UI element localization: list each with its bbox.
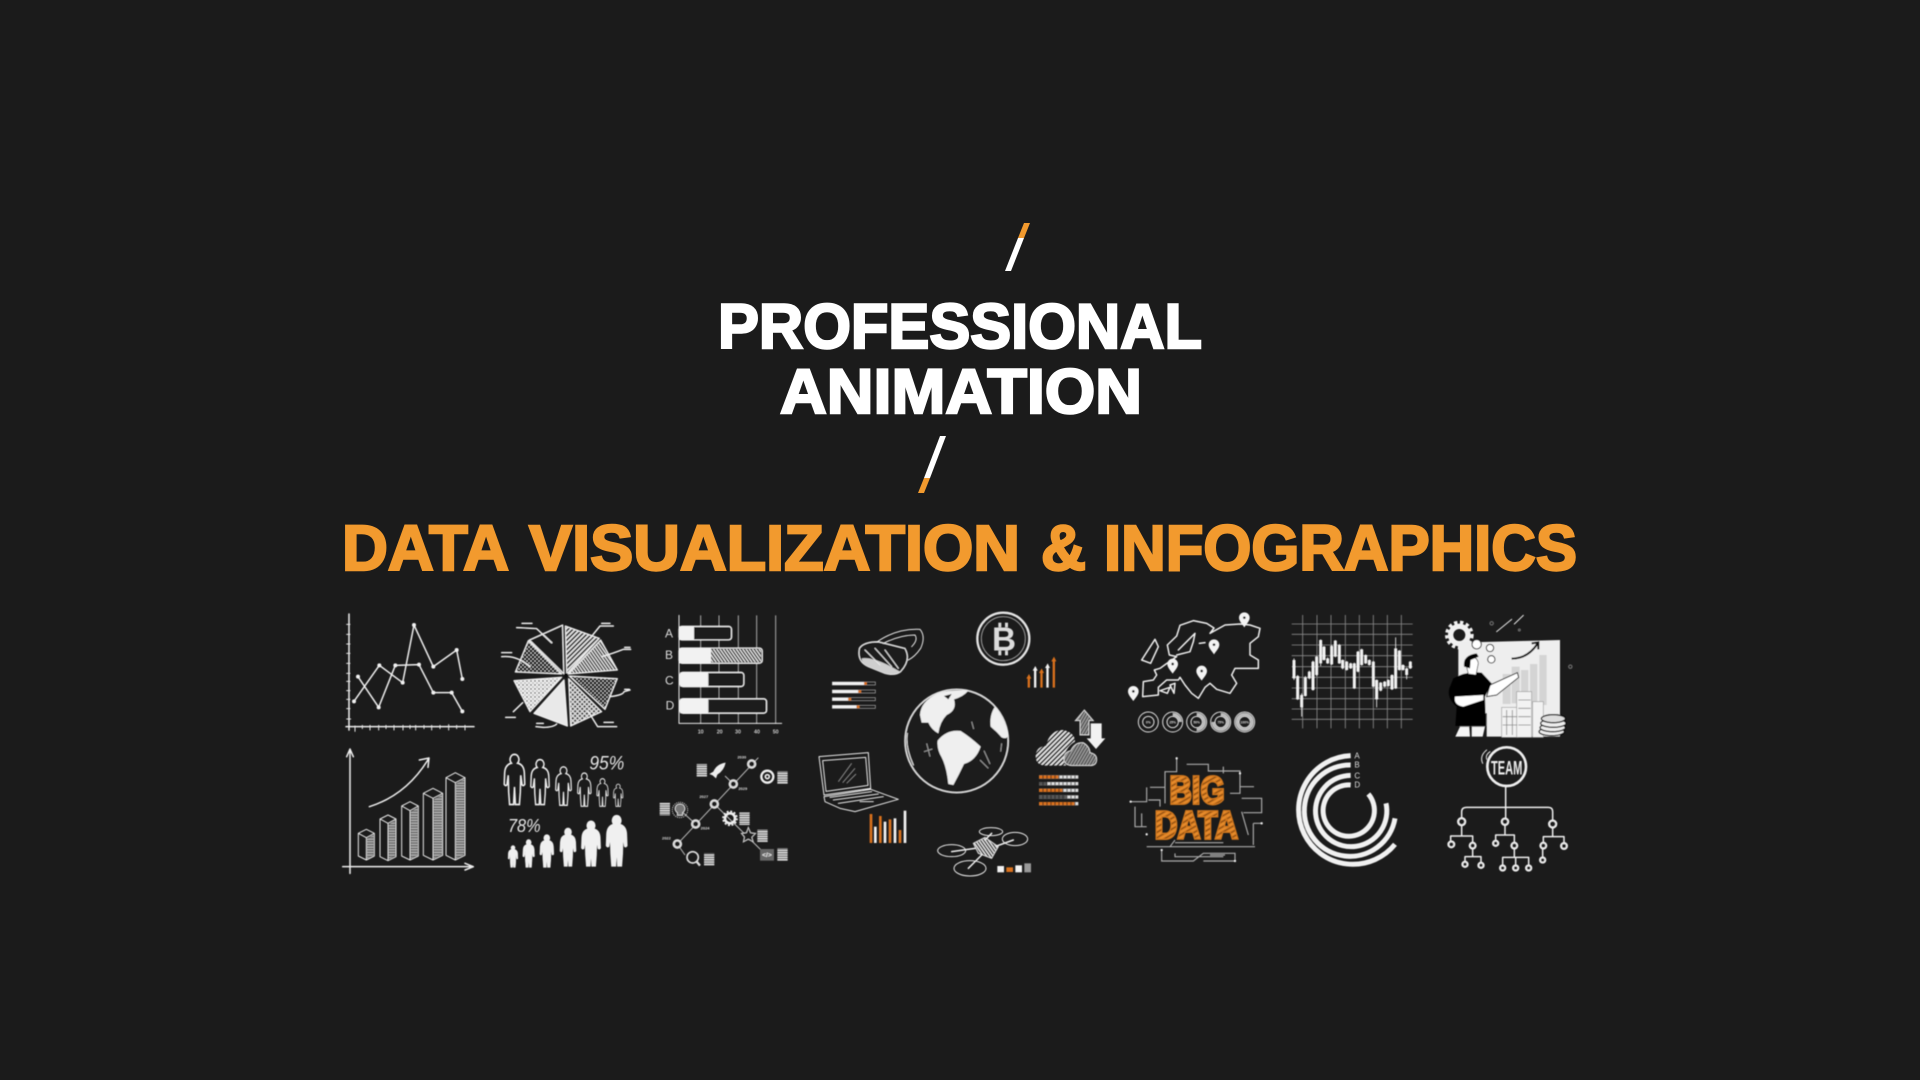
dot matrix xyxy=(1039,775,1078,806)
target icon xyxy=(761,771,773,783)
timeline roadmap: 2027 xyxy=(699,794,709,799)
timeline roadmap: 2030 xyxy=(737,755,747,760)
radial bar chart: C xyxy=(1354,772,1360,781)
subtitle: data visualization and infographics: INFOGRAPHICS xyxy=(1104,512,1577,584)
horizontal bar chart: A xyxy=(665,626,673,640)
VR headset xyxy=(859,629,923,674)
bottom slash xyxy=(918,436,946,493)
europe map with pins: 50% xyxy=(1193,720,1200,724)
subtitle: data visualization and infographics xyxy=(342,512,1577,584)
south america xyxy=(937,731,981,785)
bitcoin coin xyxy=(977,613,1029,665)
buildings xyxy=(1502,692,1543,737)
bitcoin coin: B xyxy=(992,622,1016,659)
center cluster group xyxy=(819,613,1105,876)
cloud sync xyxy=(1036,710,1105,766)
horizontal bar chart: 50 xyxy=(773,730,779,736)
timeline roadmap: 2029 xyxy=(738,786,748,791)
horizontal bar chart: D xyxy=(666,699,675,713)
big data circuit lettering xyxy=(1129,757,1263,862)
north america xyxy=(920,690,968,733)
people percentages: 95% xyxy=(589,753,624,774)
horizontal bar chart: 40 xyxy=(754,730,760,736)
board xyxy=(1458,640,1560,737)
heading: professional animation xyxy=(718,292,1202,427)
europe map with pins xyxy=(1128,612,1260,732)
left icon column group xyxy=(343,614,788,873)
heading: professional animation: PROFESSIONAL xyxy=(718,292,1202,362)
subtitle: data visualization and infographics: VISUALIZATION xyxy=(529,512,1020,584)
code icon: </> xyxy=(762,852,772,859)
europe map with pins: 0% xyxy=(1146,720,1151,724)
progress rings xyxy=(1138,712,1255,732)
timeline roadmap xyxy=(660,755,788,866)
vertical bars chart xyxy=(870,811,906,843)
presenter with chart xyxy=(1447,615,1572,737)
timeline roadmap: 2024 xyxy=(701,826,710,831)
line chart xyxy=(346,614,474,731)
heading: professional animation: ANIMATION xyxy=(780,357,1142,427)
star icon xyxy=(741,827,756,842)
people percentages xyxy=(504,753,627,867)
globe xyxy=(905,689,1008,793)
outlined figures 95 percent xyxy=(504,754,623,806)
right icon column group xyxy=(1128,612,1572,871)
big data circuit lettering: BIG xyxy=(1169,769,1225,812)
radial bar chart: A xyxy=(1354,751,1360,760)
gear xyxy=(1447,622,1472,648)
hatched pie chart xyxy=(502,623,631,727)
subtitle: data visualization and infographics: DATA xyxy=(342,512,509,584)
subtitle: data visualization and infographics: & xyxy=(1041,512,1086,584)
horizontal bar chart: C xyxy=(665,673,674,687)
top slash xyxy=(1005,223,1030,271)
gear icon xyxy=(723,811,737,825)
europe map with pins: 100% xyxy=(1240,720,1249,724)
radial bar chart: B xyxy=(1354,761,1360,770)
europe map with pins: 75% xyxy=(1217,720,1224,724)
candlestick chart xyxy=(1292,615,1413,728)
laptop xyxy=(819,753,898,812)
europe map with pins: 25% xyxy=(1169,720,1176,724)
horizontal bar chart: 30 xyxy=(735,730,741,736)
coin stack xyxy=(1539,715,1566,736)
timeline roadmap: 2022 xyxy=(662,835,672,840)
filled figures 78 percent xyxy=(508,815,627,867)
rising arrows chart xyxy=(1026,657,1056,688)
bulb icon xyxy=(672,802,688,818)
slider bars xyxy=(832,682,875,708)
team org chart: TEAM xyxy=(1491,759,1522,780)
horizontal bar chart: 10 xyxy=(698,730,704,736)
horizontal bar chart: B xyxy=(665,648,673,662)
rocket icon xyxy=(709,763,726,778)
horizontal bar chart: 20 xyxy=(717,730,723,736)
people percentages: 78% xyxy=(508,815,541,836)
radial bar chart: D xyxy=(1354,781,1360,790)
magnifier icon xyxy=(687,852,700,866)
horizontal bar chart xyxy=(665,615,782,736)
radial bar chart xyxy=(1299,751,1395,864)
africa edge xyxy=(990,707,1008,738)
drone xyxy=(938,828,1031,876)
person xyxy=(1449,653,1519,737)
icon grid xyxy=(343,612,1572,876)
team org chart xyxy=(1448,747,1567,871)
rising 3D bar chart xyxy=(343,749,473,873)
big data circuit lettering: DATA xyxy=(1155,804,1238,847)
